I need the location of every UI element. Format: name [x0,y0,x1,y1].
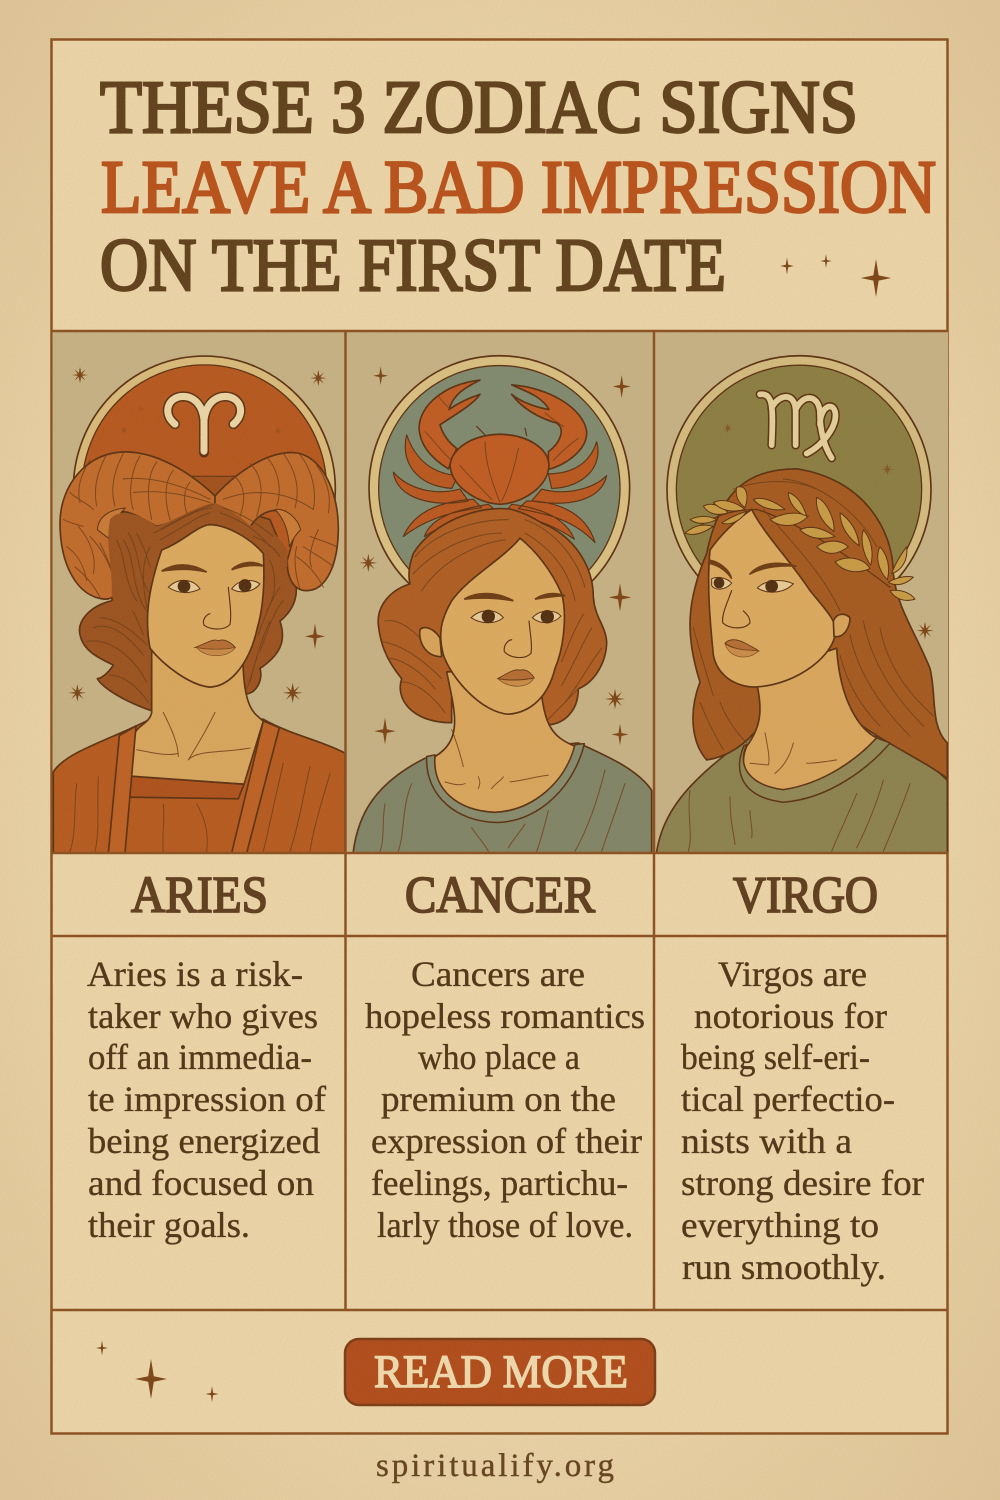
face [147,525,264,687]
button: read more [345,1339,655,1405]
text block: Aries description: and focused on [88,1163,314,1203]
robe straps [108,721,279,853]
text block: Virgo description: notorious for [694,996,887,1036]
title: THESE 3 ZODIAC SIGNS [100,65,858,149]
robe folds [70,763,330,851]
halo sparkles [723,423,893,476]
panel: Aries portrait [53,331,345,853]
text block: Virgo description [681,954,924,1287]
crab body [450,434,549,504]
text block: Cancer description: hopeless romantics [365,996,645,1036]
text block: Virgo description: run smoothly. [682,1247,886,1287]
text block: Virgo description: tical perfectio- [681,1079,895,1119]
facial features [464,593,565,686]
text block: Virgo description: strong desire for [681,1163,924,1203]
shirt folds [380,770,625,851]
face [709,509,835,687]
title stars [780,254,891,297]
hair strands [382,520,602,719]
back hair [690,469,947,779]
sign name: Virgo: VIRGO [733,865,878,923]
title: ON THE FIRST DATE [100,223,726,307]
text block: Aries description [87,954,326,1245]
text block: Cancer description: who place a [418,1037,580,1077]
text block: Virgo description: everything to [681,1205,879,1245]
halo: Virgo [667,356,931,624]
t-shirt [657,736,947,853]
neck lines [137,713,250,760]
facial features [710,560,797,657]
shirt collar [427,744,584,823]
crab legs [393,435,607,543]
hair strands [87,560,283,702]
panel: Virgo portrait [655,331,948,853]
face [441,538,564,714]
sign name: Aries: ARIES [131,865,268,923]
panel: Cancer portrait [346,331,653,853]
button: read more: READ MORE [374,1345,628,1397]
robe collar [126,776,244,799]
text block: Virgo description: nists with a [681,1121,852,1161]
text block: Aries description: taker who gives [88,996,318,1036]
text block: Cancer description: Cancers are [411,954,585,994]
robe [53,719,345,853]
icon: left ram horn [60,452,215,599]
text block: Virgo description: being self-eri- [681,1037,870,1077]
neck lines [750,733,837,773]
ear [833,614,850,637]
text block: Cancer description: feelings, partichu- [371,1163,628,1203]
horn cap [185,476,242,499]
halo: Cancer [369,356,630,620]
icon: crab [393,380,607,543]
text block: Aries description: Aries is a risk- [87,954,303,994]
front hair [108,503,287,638]
hair [378,509,607,725]
text block: Aries description: off an immedia- [88,1037,312,1077]
ear [420,628,442,657]
text block: Cancer description [365,954,645,1245]
icon: Virgo symbol [760,394,835,458]
sign name: Cancer: CANCER [405,865,596,923]
text block: Cancer description: expression of their [371,1121,642,1161]
title: LEAVE A BAD IMPRESSION [101,145,936,229]
crab claws [419,380,480,469]
neck and chest [743,648,877,790]
icon: Aries symbol [168,396,241,453]
text block: Aries description: being energized [88,1121,320,1161]
laurel wreath [685,487,915,600]
halo: Aries [73,356,335,622]
text block: Cancer description: larly those of love. [377,1205,633,1245]
neck and chest [435,668,575,812]
halo sparkles [120,405,282,435]
shirt collar [740,738,890,802]
text block: Aries description: their goals. [88,1205,250,1245]
grid lines [52,331,948,1310]
title [100,65,936,307]
icon: right ram horn [215,453,338,591]
footer stars [96,1340,218,1402]
stars [69,367,326,703]
footer website: spiritualify.org [376,1448,614,1484]
stars [916,622,934,639]
back hair [79,499,296,711]
t-shirt [353,743,652,853]
neck and chest [129,648,263,784]
hair strands: front [117,504,280,611]
neck lines [445,729,548,789]
text block: Virgo description: Virgos are [718,954,867,994]
stars [359,366,631,745]
shirt folds [688,780,910,851]
facial features [162,563,263,656]
text block: Cancer description: premium on the [381,1079,616,1119]
hair strands [693,479,933,750]
text block: Aries description: te impression of [88,1079,326,1119]
